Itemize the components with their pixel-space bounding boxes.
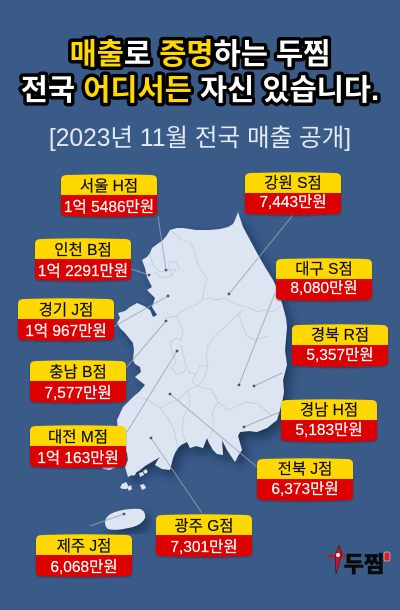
- card: 경북 R점: [292, 324, 388, 367]
- card: 제주 J점: 제주 J점: [57, 537, 111, 555]
- card: 대구 S점: 대구 S점: [295, 260, 353, 278]
- card: 대전 M점: 대전 M점: [48, 428, 108, 446]
- card: 제주 J점: [36, 534, 132, 577]
- card: 경남 H점: 경남 H점: [300, 401, 358, 419]
- card: 경남 H점: 5,183만원: [295, 421, 363, 439]
- title: 전국 어디서든 자신 있습니다.: [21, 74, 379, 107]
- card: 경북 R점: 5,357만원: [306, 346, 374, 364]
- card: 전북 J점: 6,373만원: [271, 480, 339, 498]
- card: 광주 G점: 광주 G점: [174, 517, 234, 535]
- location dots: [123, 269, 255, 515]
- card: 대전 M점: [30, 425, 126, 468]
- logo: 두찜: [344, 552, 384, 577]
- card: 인천 B점: 인천 B점: [54, 241, 112, 259]
- card: 서울 H점: [61, 174, 157, 217]
- card: 서울 H점: 1억 5486만원: [64, 198, 154, 216]
- card: 광주 G점: 7,301만원: [170, 538, 238, 556]
- card: 제주 J점: 6,068만원: [50, 558, 118, 576]
- card: 인천 B점: 1억 2291만원: [38, 262, 128, 280]
- card: 경기 J점: 1억 967만원: [25, 322, 107, 340]
- card: 충남 B점: 7,577만원: [44, 384, 112, 402]
- card: 경기 J점: [18, 298, 114, 341]
- province borders: [136, 231, 283, 448]
- card: 광주 G점: [156, 514, 252, 557]
- title: 매출로 증명하는 두찜: [70, 38, 330, 71]
- card: 경남 H점: [281, 399, 377, 442]
- card: 대구 S점: [276, 258, 372, 301]
- subtitle: [2023년 11월 전국 매출 공개]: [49, 124, 351, 152]
- card: 경기 J점: 경기 J점: [39, 301, 93, 319]
- card: 충남 B점: [30, 360, 126, 403]
- card: 전북 J점: [257, 458, 353, 501]
- card: 강원 S점: [245, 172, 341, 215]
- card: 경북 R점: 경북 R점: [311, 326, 369, 344]
- card: 강원 S점: 7,443만원: [259, 193, 327, 211]
- map of South Korea: [102, 212, 287, 530]
- mainland: [117, 212, 287, 477]
- title: [21, 38, 379, 107]
- card: 인천 B점: [35, 238, 131, 281]
- card: 전북 J점: 전북 J점: [278, 460, 332, 478]
- card: 서울 H점: 서울 H점: [80, 177, 138, 195]
- Jeju island: [105, 509, 145, 530]
- small islands: [102, 463, 148, 491]
- leader lines: [90, 215, 293, 526]
- card: 대전 M점: 1억 163만원: [37, 449, 119, 467]
- card: 충남 B점: 충남 B점: [49, 363, 107, 381]
- card: 대구 S점: 8,080만원: [290, 279, 358, 297]
- logo: [328, 545, 390, 577]
- card: 강원 S점: 강원 S점: [264, 174, 322, 192]
